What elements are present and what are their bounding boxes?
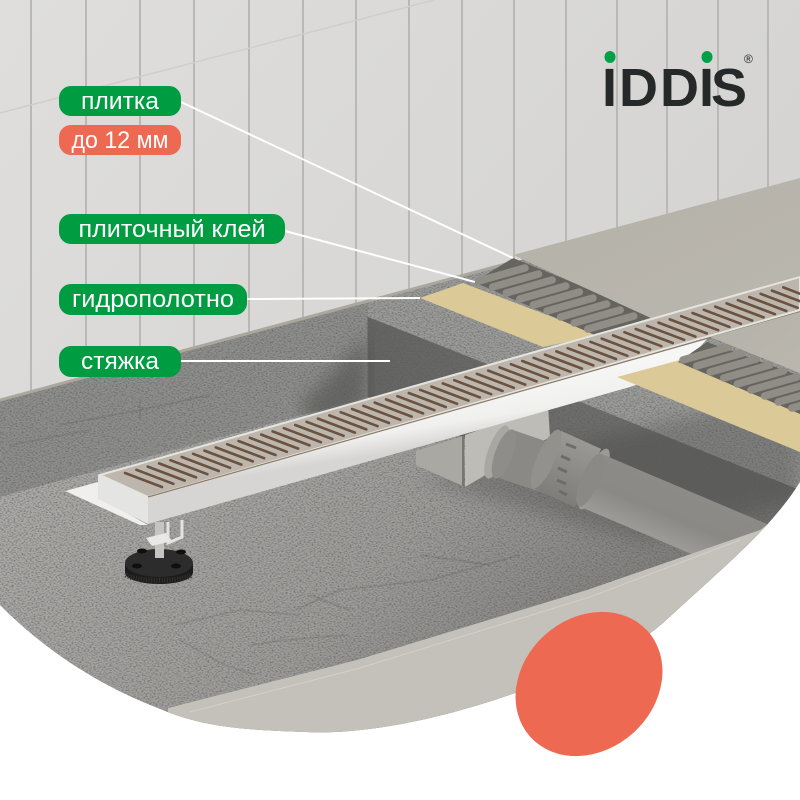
label: screed [59,346,181,377]
mounting flange [65,482,148,525]
label: tile adhesive: плиточный клей [78,216,266,243]
waterproof membrane right [617,360,800,452]
label: plitka: плитка [81,88,160,115]
foreground floor slab [168,525,766,732]
channel end [98,475,148,524]
drain body box [416,405,550,487]
adjustable foot [125,520,193,584]
channel side [148,339,707,524]
concrete cracks [10,395,520,675]
tile adhesive right [678,342,800,414]
label: screed: стяжка [81,348,160,375]
floor tile left [513,178,800,319]
tile adhesive left [474,258,655,336]
waterproof membrane left [420,283,600,347]
pipe [484,426,767,568]
leader lines [181,102,513,361]
grate slots [125,287,800,487]
label: plitka [59,86,181,116]
label: thickness: до 12 мм [72,127,168,154]
label: waterproofing: гидрополотно [72,286,234,313]
floor tile right [710,312,800,373]
logo: ® [744,52,753,66]
coral accent ellipse [486,582,692,786]
grate [100,277,800,497]
tiled wall [0,0,800,420]
logo: IDDIS [602,58,747,118]
drain channel [65,277,800,525]
screed concrete [0,260,800,732]
